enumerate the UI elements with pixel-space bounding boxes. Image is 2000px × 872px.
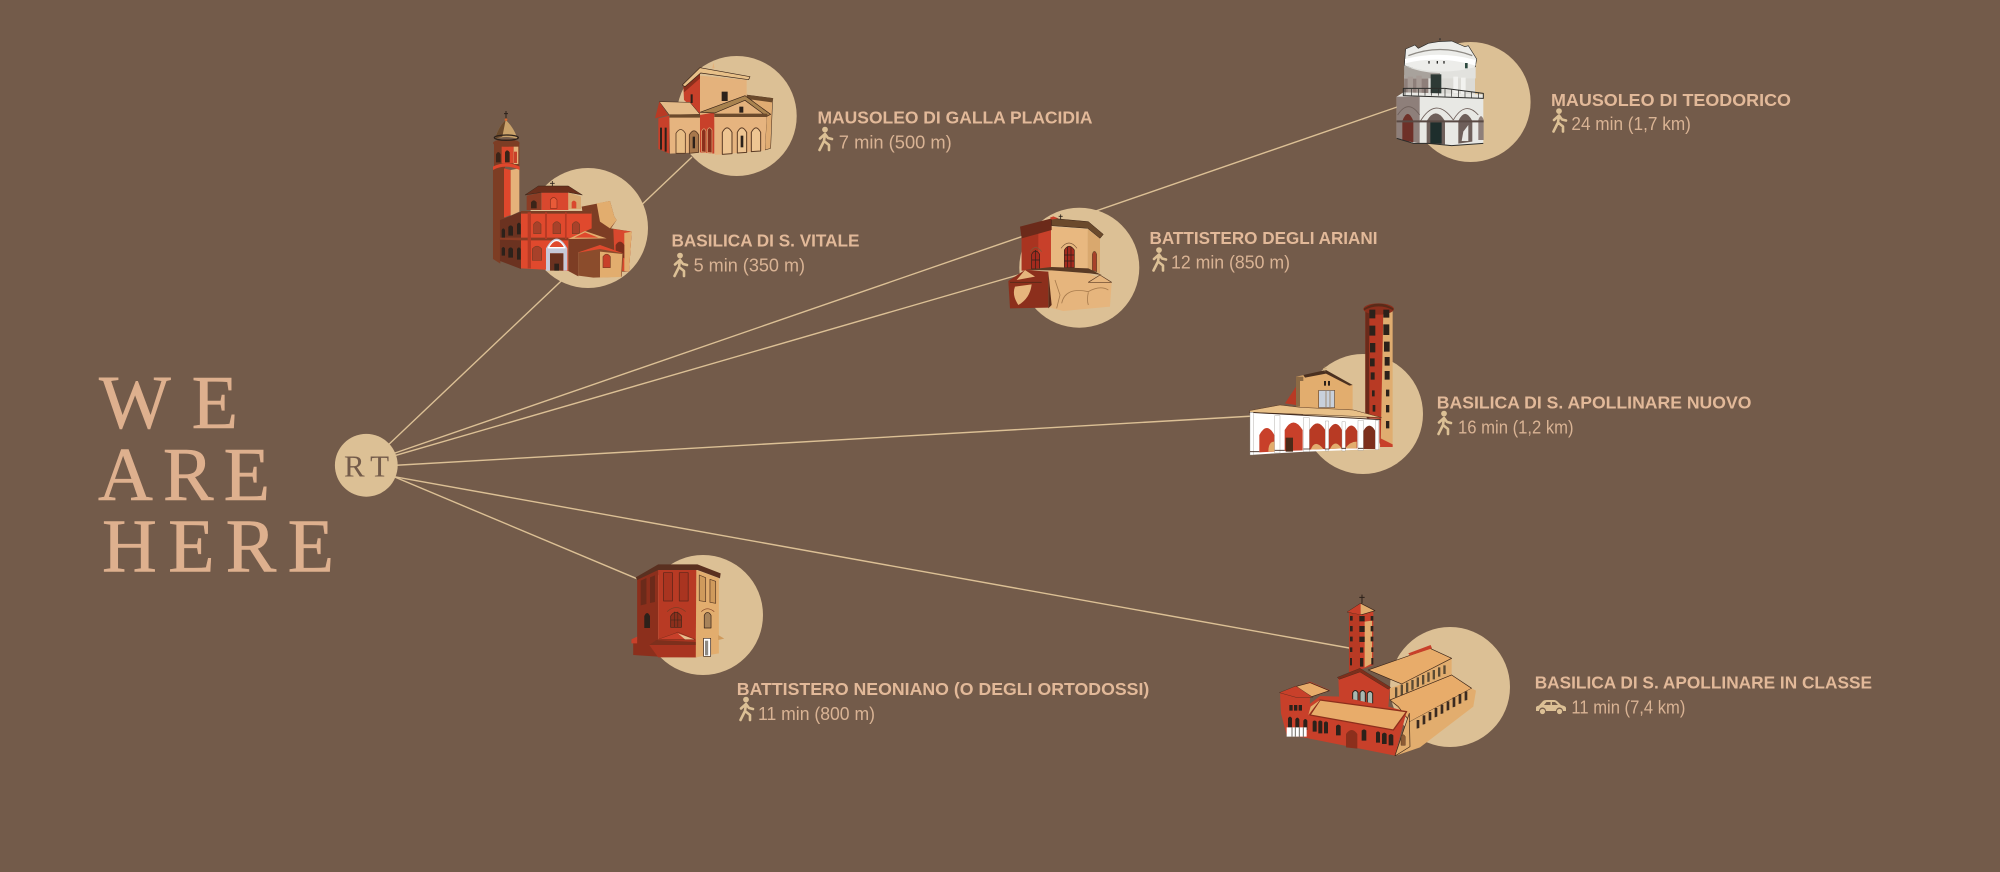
icon: walking [1554, 110, 1566, 132]
location: Mausoleo di Galla Placidia [655, 56, 1093, 176]
location: Basilica di S. Vitale [493, 111, 860, 288]
building: San Vitale [493, 111, 632, 278]
icon: walking [820, 128, 832, 150]
label: BASILICA DI S. VITALE [672, 231, 860, 251]
location: Basilica di S. Apollinare in Classe [1279, 595, 1872, 756]
icon: walking [740, 698, 753, 720]
location: Battistero degli Ariani [1008, 208, 1378, 328]
connecting lines [366, 106, 1400, 648]
icon: walking [674, 254, 687, 276]
travel time: 12 min (850 m) [1171, 252, 1290, 272]
location: Basilica di S. Apollinare Nuovo [1249, 303, 1751, 474]
travel time: 16 min (1,2 km) [1458, 417, 1574, 437]
building: Sant'Apollinare Nuovo [1249, 303, 1394, 455]
title: ARE [98, 433, 270, 517]
icon: walking [1154, 248, 1166, 270]
label: BASILICA DI S. APOLLINARE NUOVO [1437, 392, 1751, 412]
building: Battistero degli Ariani [1008, 214, 1112, 311]
label: MAUSOLEO DI GALLA PLACIDIA [818, 107, 1093, 127]
travel time: 24 min (1,7 km) [1571, 114, 1691, 134]
marker: RT: RT [344, 448, 389, 484]
building: Mausoleo di Teodorico [1397, 38, 1484, 146]
icon: car [1536, 700, 1566, 714]
title: WE [99, 361, 238, 445]
building: Galla Placidia [655, 62, 773, 155]
building: Battistero Neoniano [631, 564, 724, 657]
title [98, 361, 334, 588]
title: HERE [102, 504, 334, 588]
marker: RT [335, 434, 398, 497]
label: BASILICA DI S. APOLLINARE IN CLASSE [1535, 672, 1872, 692]
travel time: 7 min (500 m) [839, 132, 952, 152]
building: Sant'Apollinare in Classe [1279, 595, 1476, 756]
location: Mausoleo di Teodorico [1397, 38, 1791, 162]
location: Battistero Neoniano [631, 555, 1149, 724]
label: BATTISTERO NEONIANO (O DEGLI ORTODOSSI) [737, 679, 1149, 699]
icon: walking [1438, 412, 1451, 434]
label: BATTISTERO DEGLI ARIANI [1150, 228, 1378, 248]
travel time: 11 min (7,4 km) [1571, 697, 1685, 717]
travel time: 11 min (800 m) [758, 704, 875, 724]
travel time: 5 min (350 m) [694, 256, 805, 276]
label: MAUSOLEO DI TEODORICO [1551, 90, 1791, 110]
